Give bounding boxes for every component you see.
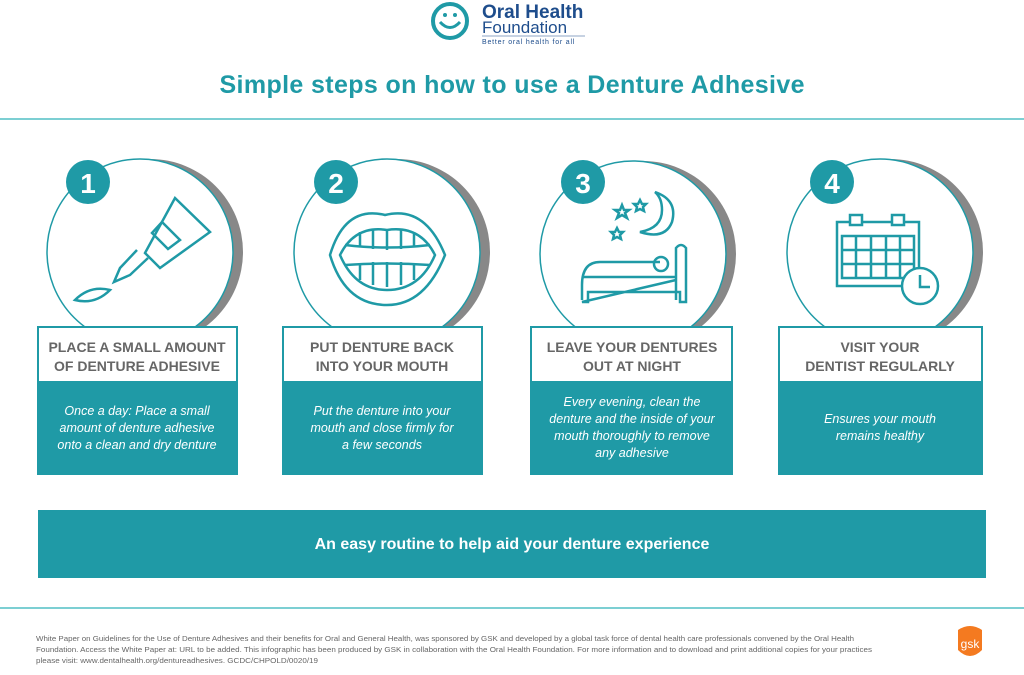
banner [38,510,986,578]
step 3 [530,160,736,475]
icon: calendar with clock [837,215,938,304]
footer text: White Paper on Guidelines for the Use of Denture Adhesives and their benefits for Oral and General Health, was sponsored by GSK and developed by a global task force of dental health care professionals convened by the Oral Health [36,634,854,643]
step 2: INTO YOUR MOUTH [316,358,448,374]
step 4: Ensures your mouth [824,412,936,426]
banner: An easy routine to help aid your denture experience [315,536,709,553]
step 3: 3 [575,168,591,199]
step 3: Every evening, clean the [564,395,700,409]
step 3: any adhesive [595,446,669,460]
step 4: VISIT YOUR [840,339,920,355]
step 4 [778,159,983,475]
step 2: a few seconds [342,438,422,452]
step 1: amount of denture adhesive [60,421,215,435]
footer text: please visit: www.dentalhealth.org/dentureadhesives. GCDC/CHPOLD/0020/19 [36,656,318,665]
step 2: 2 [328,168,344,199]
step 1: PLACE A SMALL AMOUNT [48,339,226,355]
step 3: LEAVE YOUR DENTURES [547,339,717,355]
step 3: mouth thoroughly to remove [554,429,710,443]
step 2: PUT DENTURE BACK [310,339,454,355]
gsk logo: gsk [961,637,980,651]
logo [433,2,585,46]
logo: Oral Health [482,2,583,23]
icon: mouth [330,213,445,305]
step 1: 1 [80,168,96,199]
step 4: DENTIST REGULARLY [805,358,955,374]
title: Simple steps on how to use a Denture Adhesive [220,71,805,99]
step 4: remains healthy [836,429,925,443]
step 2 [282,159,490,475]
footer text [36,634,872,665]
icon: tube [75,198,210,301]
logo: Better oral health for all [482,39,575,46]
footer text: Foundation. Access the White Paper at: URL to be added. This infographic has been produced by GSK in collaboration with the Oral Health Foundation. For more information and to download and print additional copies for your practices [36,645,872,654]
step 3: denture and the inside of your [549,412,716,426]
icon: bed and moon [582,192,686,302]
gsk logo [958,626,982,656]
step 1: OF DENTURE ADHESIVE [54,358,220,374]
step 4: 4 [824,168,840,199]
step 1: onto a clean and dry denture [57,438,217,452]
step 1: Once a day: Place a small [64,404,211,418]
step 3: OUT AT NIGHT [583,358,681,374]
logo: Foundation [482,18,567,37]
step 2: mouth and close firmly for [310,421,454,435]
step 2: Put the denture into your [314,404,451,418]
step 1 [37,159,243,475]
